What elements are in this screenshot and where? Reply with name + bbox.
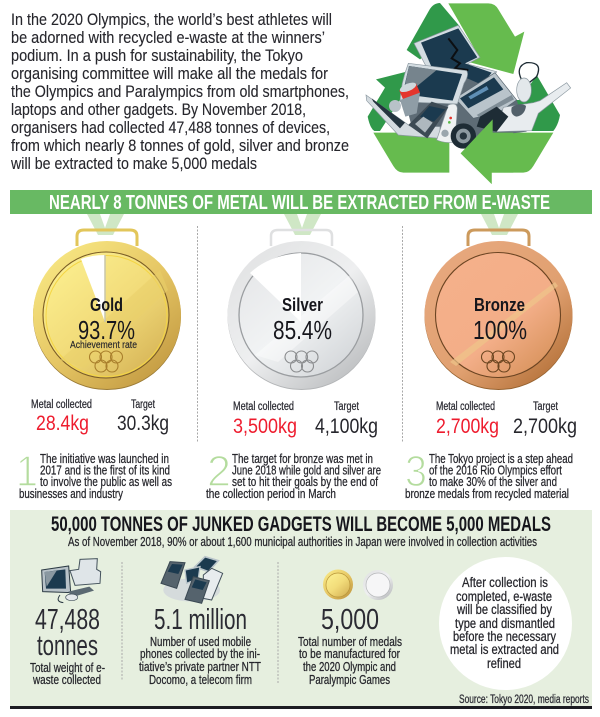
silver stats: Metal collected xyxy=(233,401,294,413)
stat: 47,488 tonnes: Total weight of e- xyxy=(30,661,105,675)
stat: 47,488 tonnes: waste collected xyxy=(32,673,101,687)
stat: 47,488 tonnes: 47,488 xyxy=(35,604,100,636)
note 2: 2 xyxy=(207,447,231,496)
panel: silver medal xyxy=(228,214,378,438)
medal label: 93.7% xyxy=(78,315,135,345)
callout: after collection: After collection is xyxy=(462,575,548,590)
gold stats: 30.3kg xyxy=(117,412,169,435)
medal label: Silver xyxy=(282,295,323,315)
callout: after collection: type and dismantled xyxy=(455,616,555,631)
icon: small silver medal xyxy=(363,570,393,600)
note 1: 2017 and is the first of its kind xyxy=(40,464,170,478)
stat: 5.1 million xyxy=(139,604,261,687)
note 3: 3 xyxy=(405,447,427,496)
stat: 5,000 medals: 5,000 xyxy=(321,604,379,636)
note 1: businesses and industry xyxy=(19,487,124,501)
intro text: In the 2020 Olympics, the world’s best athletes will xyxy=(11,10,332,29)
panel: bronze medal xyxy=(424,214,577,438)
callout: after collection: refined xyxy=(487,656,521,671)
note 1: The initiative was launched in xyxy=(40,452,169,466)
mouse with cable xyxy=(519,63,539,83)
stat: 5,000 medals: Paralympic Games xyxy=(309,673,390,687)
stat: 5,000 medals xyxy=(298,604,402,687)
note 2: June 2018 while gold and silver are xyxy=(232,464,381,478)
intro text xyxy=(10,10,349,173)
stat: 5,000 medals: to be manufactured for xyxy=(299,647,400,661)
achievement wedge xyxy=(81,255,105,322)
stat: 47,488 tonnes xyxy=(30,604,105,687)
phone xyxy=(408,102,448,138)
bronze stats xyxy=(436,401,577,438)
icon: small gold medal xyxy=(323,570,353,600)
stat: 5.1 million: tiative’s private partner NTT xyxy=(139,660,261,674)
icon: mobile phones xyxy=(161,557,223,603)
callout: after collection: metal is extracted and xyxy=(450,642,559,657)
keyboard laptop xyxy=(366,95,440,138)
medal label xyxy=(473,295,527,345)
bronze stats: Metal collected xyxy=(436,401,495,413)
medal label: 85.4% xyxy=(273,315,332,345)
gold stats: Metal collected xyxy=(31,399,92,411)
bronze stats: Target xyxy=(533,401,559,413)
stat: 5.1 million: Docomo, a telecom firm xyxy=(149,673,252,687)
note 1 xyxy=(16,447,172,501)
stat: 5.1 million: Number of used mobile xyxy=(150,635,251,649)
note 3: of the 2016 Rio Olympics effort xyxy=(429,464,562,478)
note 2: The target for bronze was met in xyxy=(232,452,373,466)
medal label xyxy=(273,295,332,345)
silver stats: Target xyxy=(334,401,360,413)
back tablet xyxy=(414,25,497,103)
bronze stats: 2,700kg xyxy=(436,415,499,438)
gold stats: 28.4kg xyxy=(36,412,89,435)
intro text: the Olympics and Paralympics from old smartphones, xyxy=(11,82,349,101)
achievement wedge xyxy=(250,253,301,322)
note 2: set to hit their goals by the end of xyxy=(232,475,378,489)
gamepad xyxy=(437,104,457,143)
medal label: Gold xyxy=(90,295,123,315)
stat: 5.1 million: phones collected by the ini- xyxy=(140,647,260,661)
panel: junked gadgets xyxy=(10,510,592,709)
stat: 5,000 medals: Total number of medals xyxy=(298,635,402,649)
note 2: the collection period in March xyxy=(206,487,336,501)
white device xyxy=(497,83,571,132)
intro text: laptops and other gadgets. By November 2018, xyxy=(11,100,306,119)
ribbon xyxy=(481,214,518,235)
battery xyxy=(399,83,420,100)
gold stats: Target xyxy=(131,399,156,411)
callout: after collection: completed, e-waste xyxy=(456,589,552,604)
olympic rings xyxy=(90,351,122,372)
callout: after collection: will be classified by xyxy=(456,602,552,617)
ribbon xyxy=(284,214,321,235)
callout: after collection: before the necessary xyxy=(453,629,556,644)
intro text: organisers had collected 47,488 tonnes of devices, xyxy=(11,118,330,137)
gold stats xyxy=(31,399,169,435)
pile backing xyxy=(405,77,527,140)
medal label: Bronze xyxy=(474,295,525,315)
medal label: 100% xyxy=(473,315,527,345)
bronze stats: 2,700kg xyxy=(513,415,577,438)
medal label: Achievement rate xyxy=(70,340,137,351)
panel: gold medal xyxy=(31,214,181,435)
silver stats xyxy=(233,401,378,438)
camera lens xyxy=(451,123,476,149)
intro text: podium. In a push for sustainability, the Tokyo xyxy=(11,46,303,65)
intro text: will be extracted to make 5,000 medals xyxy=(10,154,257,173)
callout: after collection xyxy=(439,557,572,690)
icon: computer and printer xyxy=(42,559,101,603)
intro text: from which nearly 8 tonnes of gold, silver and bronze xyxy=(11,136,349,155)
olympic rings xyxy=(285,351,318,372)
stat: 47,488 tonnes: tonnes xyxy=(37,630,98,662)
note 3: to make 30% of the silver and xyxy=(429,475,557,489)
arrow tip overlay xyxy=(461,119,513,184)
ribbon xyxy=(87,214,124,235)
note 1: 1 xyxy=(16,447,38,496)
intro text: be adorned with recycled e-waste at the winners’ xyxy=(11,28,325,47)
note 2 xyxy=(206,447,381,501)
silver stats: 4,100kg xyxy=(315,415,378,438)
medal label xyxy=(70,295,137,351)
front tablet xyxy=(400,63,468,104)
silver stats: 3,500kg xyxy=(233,415,297,438)
note 3 xyxy=(405,447,573,501)
stat: 5.1 million: 5.1 million xyxy=(154,604,247,636)
olympic rings xyxy=(482,351,514,372)
radio xyxy=(455,73,517,118)
intro text: organising committee will make all the medals for xyxy=(11,64,328,83)
note 1: to involve the public as well as xyxy=(40,475,172,489)
icon: recycling symbol with e-waste pile xyxy=(366,3,571,184)
stat: 5,000 medals: the 2020 Olympic and xyxy=(303,660,396,674)
